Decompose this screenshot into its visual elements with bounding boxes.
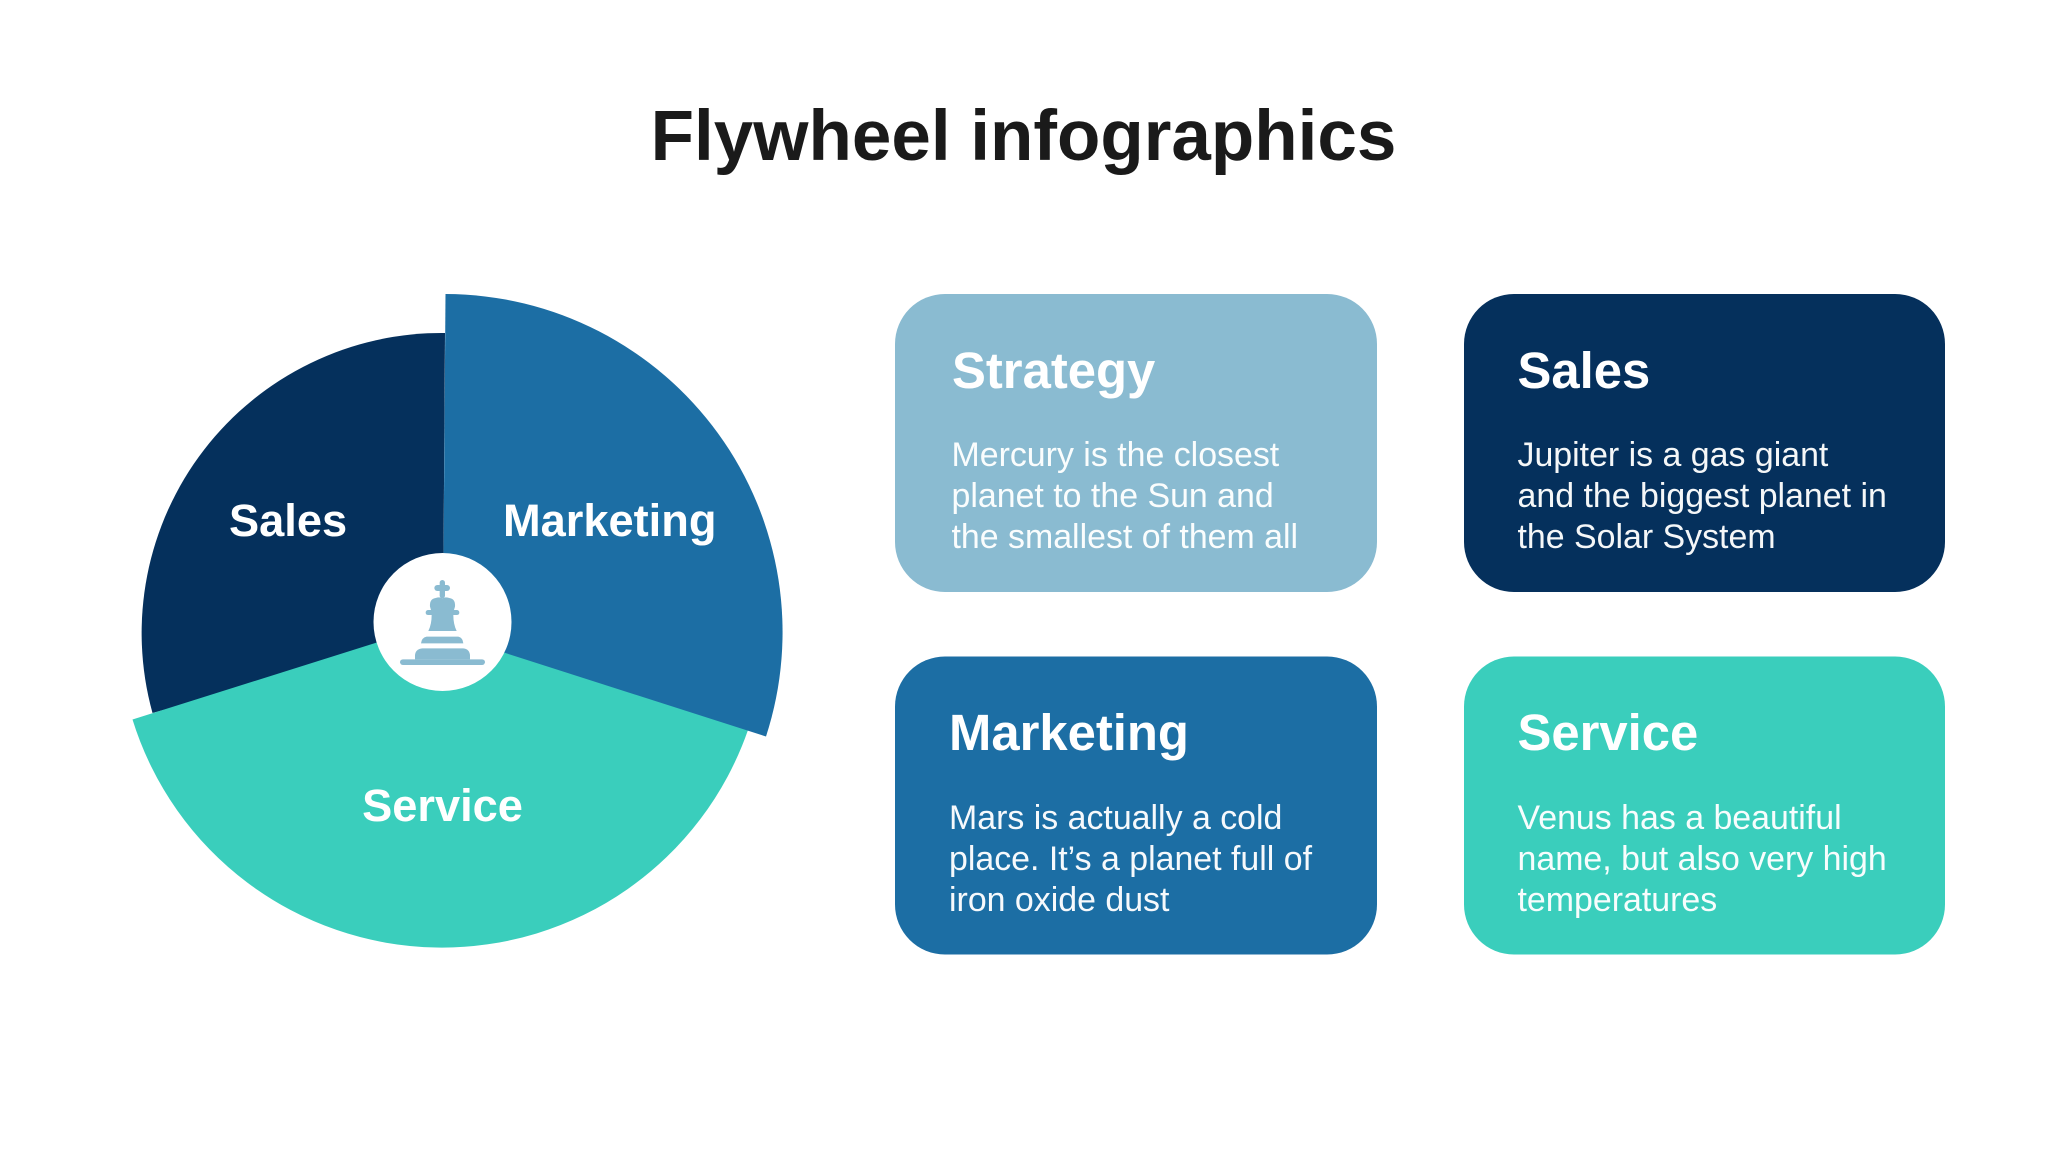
card: Service (1464, 656, 1945, 954)
title: Flywheel infographics (651, 97, 1396, 176)
card body: Jupiter is a gas giant (1518, 436, 1829, 474)
label: Sales: Sales (229, 495, 347, 546)
card body: Mercury is the closest (952, 436, 1280, 474)
segment: Sales (142, 333, 445, 713)
label: Service: Service (362, 780, 523, 831)
center hub circle (374, 553, 512, 691)
card heading: Strategy (952, 342, 1155, 399)
card body: and the biggest planet in (1518, 477, 1887, 515)
card body: the Solar System (1518, 518, 1776, 556)
card body: temperatures (1518, 881, 1717, 919)
card heading: Sales (1518, 342, 1650, 399)
card body: name, but also very high (1518, 840, 1887, 878)
card: Sales (1464, 294, 1945, 592)
card body: iron oxide dust (949, 881, 1170, 919)
label: Marketing: Marketing (503, 495, 716, 546)
card body: place. It’s a planet full of (949, 840, 1313, 878)
card background (895, 294, 1377, 592)
card: Strategy (895, 294, 1377, 592)
segment: Marketing (443, 294, 783, 736)
card body: Venus has a beautiful (1518, 799, 1842, 837)
flywheel diagram (132, 294, 783, 948)
card body: Mars is actually a cold (949, 799, 1282, 837)
card body: the smallest of them all (952, 518, 1298, 556)
card heading: Marketing (949, 704, 1189, 761)
card heading: Service (1518, 704, 1698, 761)
segment: Service (132, 622, 748, 948)
icon: chess king (400, 580, 485, 665)
card background (895, 656, 1377, 954)
card body: planet to the Sun and (952, 477, 1274, 515)
card: Marketing (895, 656, 1377, 954)
card background (1464, 656, 1945, 954)
card background (1464, 294, 1945, 592)
